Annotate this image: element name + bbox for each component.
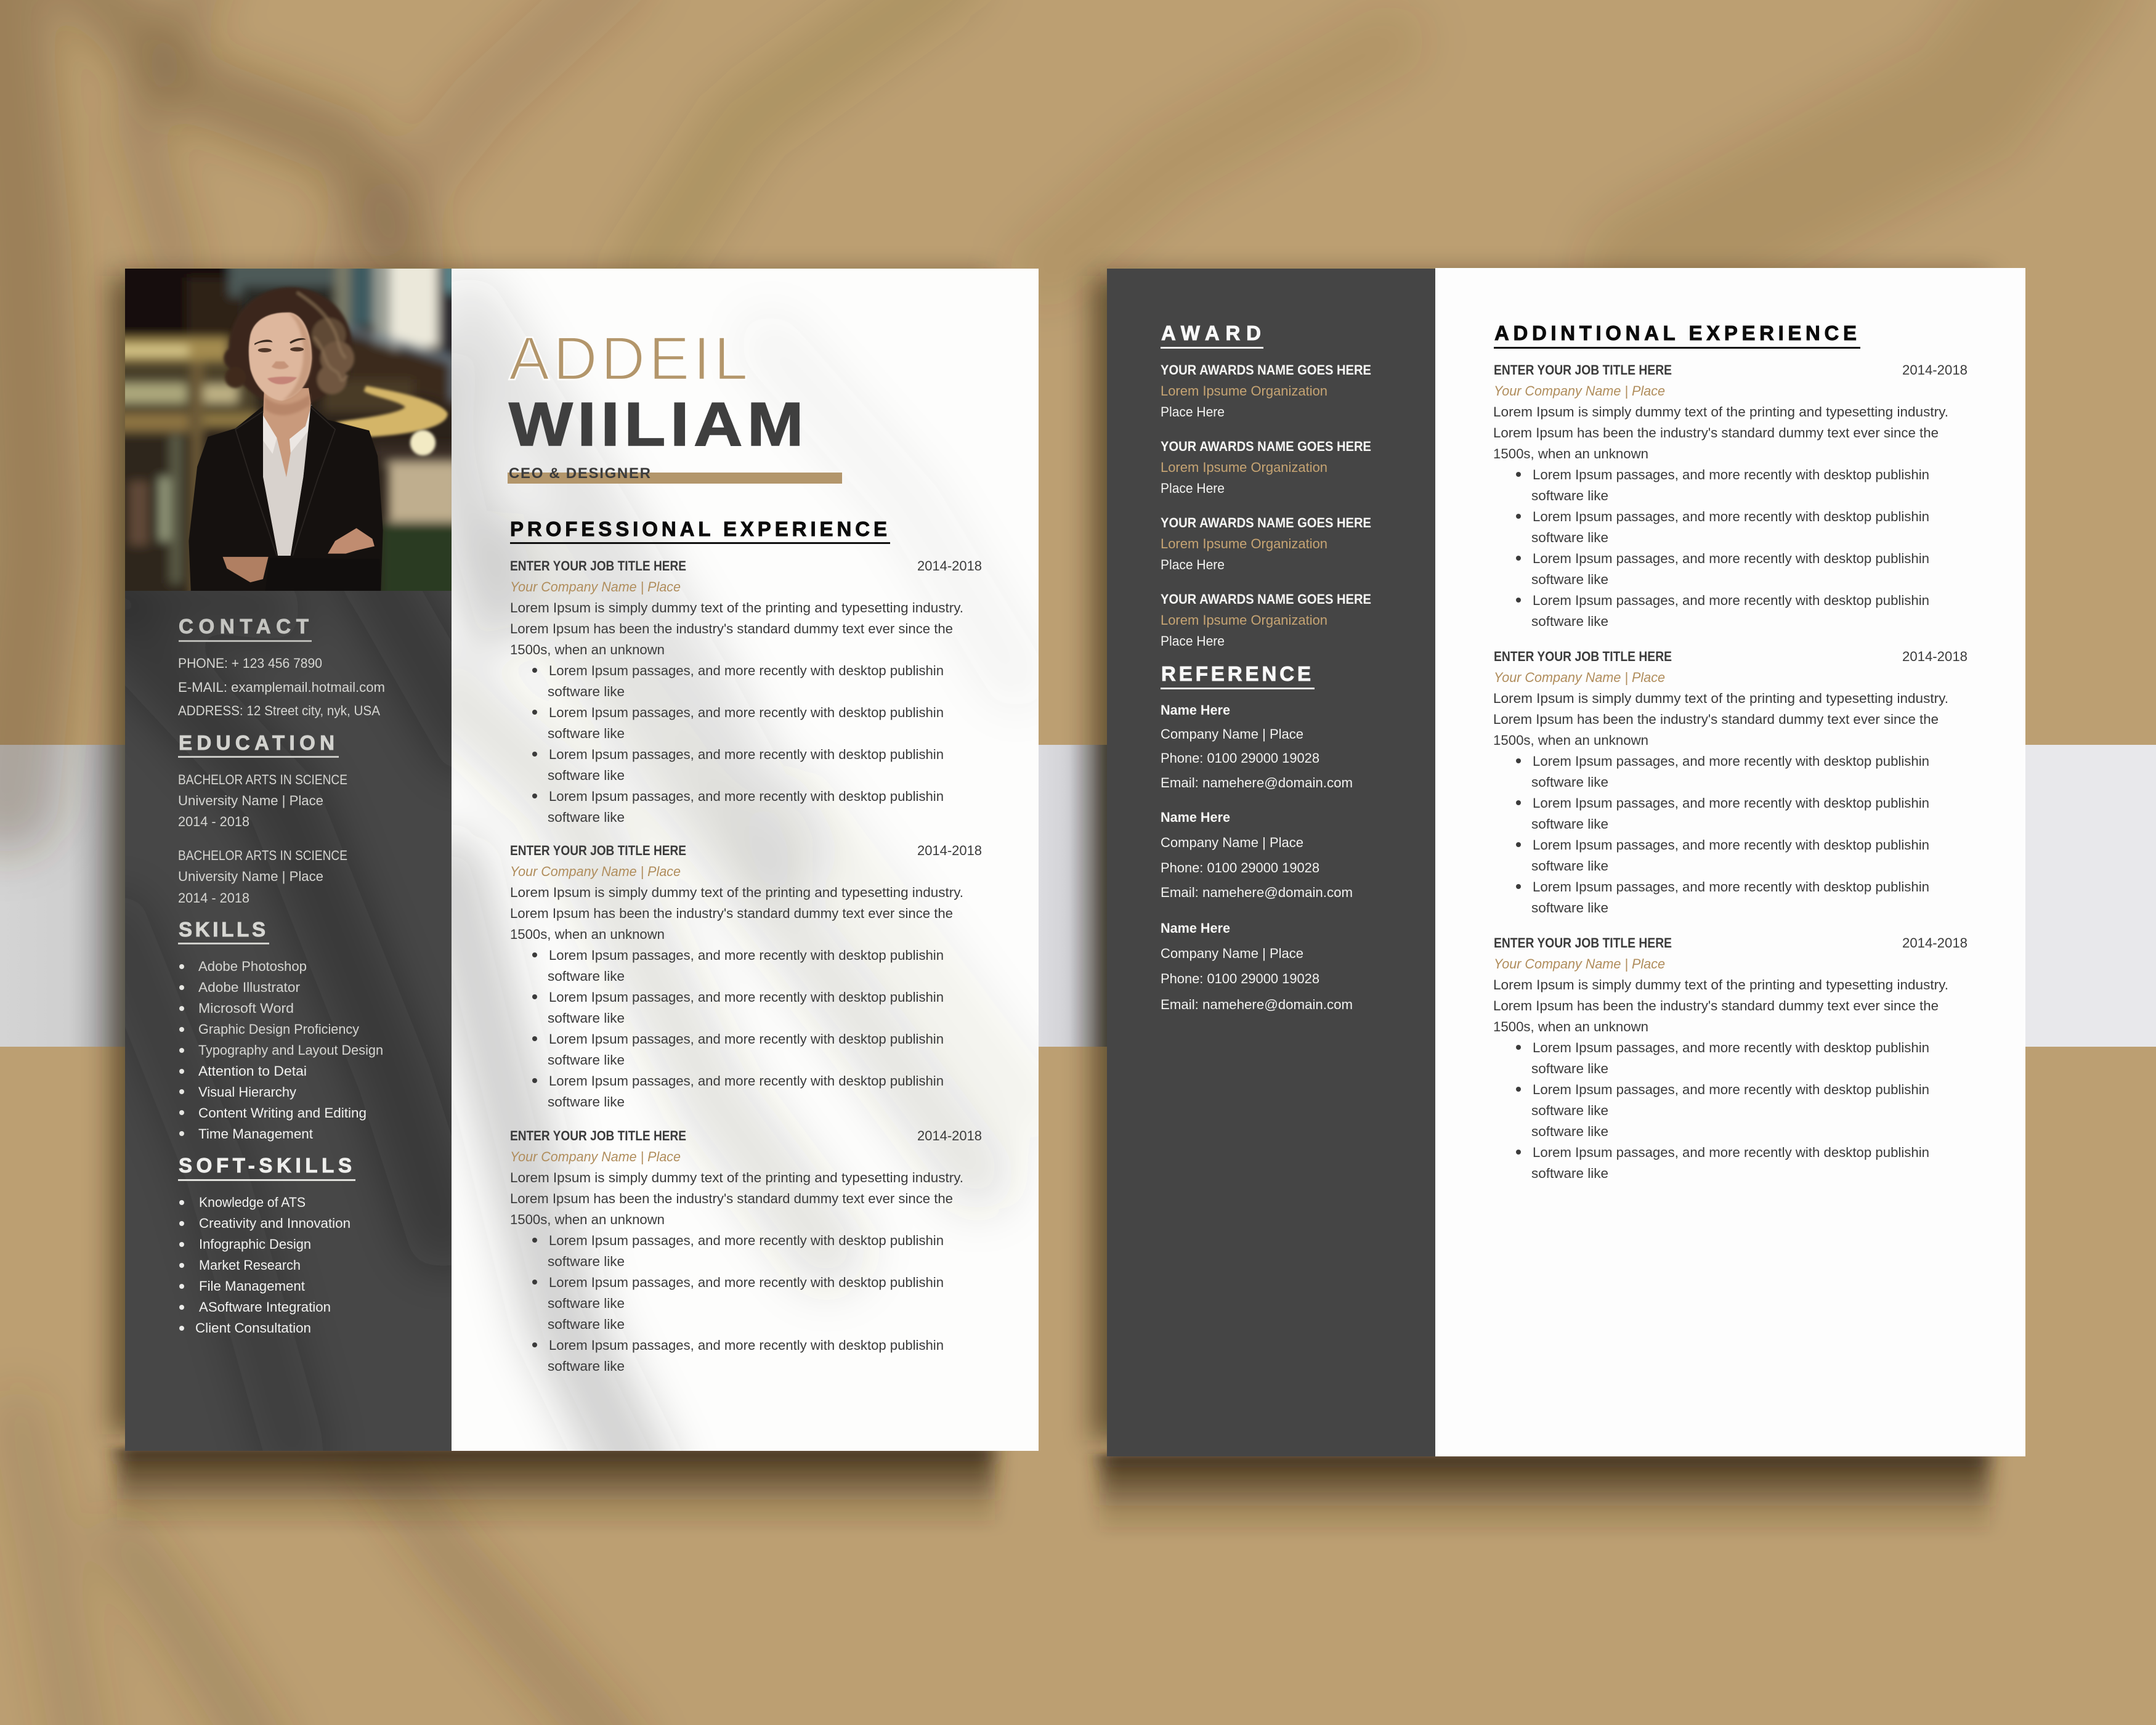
job entry 2: 2014-2018	[1902, 649, 1968, 664]
reference entries: Email: namehere@domain.com	[1161, 997, 1353, 1012]
job entry 2: software like	[1531, 816, 1608, 832]
list: soft skills: File Management	[199, 1278, 305, 1294]
job entry 1: 1500s, when an unknown	[1493, 446, 1648, 461]
list: soft skills: Market Research	[199, 1257, 301, 1273]
job entry 1: software like	[1531, 488, 1608, 503]
job entry 3: Lorem Ipsum passages, and more recently with desktop publishin	[1533, 1040, 1929, 1055]
list: soft skills: Client Consultation	[195, 1320, 311, 1336]
job entry 1	[1493, 362, 1968, 629]
job entry 2: Lorem Ipsum passages, and more recently with desktop publishin	[1533, 837, 1929, 853]
job entry 1: Lorem Ipsum has been the industry's standard dummy text ever since the	[1493, 425, 1939, 440]
award entries: Lorem Ipsume Organization	[1161, 612, 1327, 628]
job entry 3: 2014-2018	[917, 1128, 982, 1143]
job entry 2: 2014-2018	[917, 843, 982, 858]
award entries: YOUR AWARDS NAME GOES HERE	[1161, 515, 1371, 530]
panel: dark sidebar	[1107, 269, 1435, 1456]
shirt	[262, 405, 312, 556]
list: skills: Time Management	[198, 1126, 313, 1142]
job entry 1: Lorem Ipsum passages, and more recently with desktop publishin	[1533, 467, 1929, 482]
text: education entries: 2014 - 2018	[178, 890, 249, 906]
job entry 3: software like	[1531, 1166, 1608, 1181]
heading: contact: CONTACT	[179, 615, 309, 638]
hair	[224, 287, 354, 406]
panel: resume page one	[111, 256, 1039, 1479]
job entry 1: ENTER YOUR JOB TITLE HERE	[510, 558, 686, 574]
panel: dark sidebar	[125, 591, 452, 1451]
job entry 3: software like	[548, 1358, 625, 1374]
job entry 3: Lorem Ipsum is simply dummy text of the printing and typesetting industry.	[510, 1170, 963, 1185]
list: skills: Adobe Photoshop	[198, 959, 307, 974]
heading: education: EDUCATION	[179, 731, 334, 754]
job entry 1: software like	[548, 768, 625, 783]
text: education entries: 2014 - 2018	[178, 814, 249, 829]
job entry 2: software like	[1531, 858, 1608, 874]
list: soft skills: ASoftware Integration	[199, 1299, 331, 1315]
award entries: YOUR AWARDS NAME GOES HERE	[1161, 439, 1371, 454]
job entry 1: software like	[1531, 572, 1608, 587]
job entry 2: Your Company Name | Place	[510, 864, 681, 879]
job entry 2: software like	[548, 1052, 625, 1068]
heading: reference: REFERENCE	[1161, 662, 1311, 685]
reference entries: Phone: 0100 29000 19028	[1161, 750, 1319, 766]
list: soft skills: Knowledge of ATS	[199, 1195, 306, 1210]
job entry 2: Lorem Ipsum passages, and more recently with desktop publishin	[549, 1031, 944, 1047]
job entry 2: software like	[548, 1094, 625, 1110]
list: skills: Typography and Layout Design	[198, 1042, 383, 1058]
reference entries: Company Name | Place	[1161, 835, 1303, 850]
title: last name: WIILIAM	[509, 391, 804, 459]
face	[249, 312, 312, 400]
reference entries: Email: namehere@domain.com	[1161, 775, 1353, 790]
job entry 1: Lorem Ipsum is simply dummy text of the printing and typesetting industry.	[510, 600, 963, 615]
job entry 3: Lorem Ipsum has been the industry's standard dummy text ever since the	[510, 1191, 953, 1206]
award entries: YOUR AWARDS NAME GOES HERE	[1161, 591, 1371, 607]
job entry 3	[510, 1128, 982, 1374]
list: skills	[179, 959, 383, 1142]
job entry 1: 1500s, when an unknown	[510, 642, 665, 657]
job entry 1: 2014-2018	[1902, 362, 1968, 378]
job entry 2: ENTER YOUR JOB TITLE HERE	[1494, 649, 1672, 664]
job entry 2: Lorem Ipsum has been the industry's standard dummy text ever since the	[1493, 712, 1939, 727]
text: education entries: University Name | Place	[178, 793, 323, 808]
award entries: Place Here	[1161, 633, 1225, 649]
job entry 1: Lorem Ipsum passages, and more recently with desktop publishin	[549, 705, 944, 720]
sidebar shadows	[125, 591, 452, 1451]
job entry 2: Lorem Ipsum passages, and more recently with desktop publishin	[1533, 753, 1929, 769]
job entry 2: Lorem Ipsum has been the industry's standard dummy text ever since the	[510, 906, 953, 921]
job entry 1: Your Company Name | Place	[1494, 383, 1665, 399]
photo: portrait of woman in blazer	[125, 269, 452, 591]
text: education entries: University Name | Place	[178, 869, 323, 884]
job entry 2: 1500s, when an unknown	[1493, 733, 1648, 748]
neck	[263, 388, 311, 477]
job entry 2: Lorem Ipsum passages, and more recently with desktop publishin	[1533, 879, 1929, 895]
heading: award: AWARD	[1161, 322, 1261, 344]
job entry 3: Lorem Ipsum passages, and more recently with desktop publishin	[549, 1275, 944, 1290]
job entry 1: software like	[1531, 614, 1608, 629]
job entry 3: ENTER YOUR JOB TITLE HERE	[1494, 935, 1672, 951]
list: skills: Adobe Illustrator	[198, 980, 300, 995]
job entry 2: 1500s, when an unknown	[510, 927, 665, 942]
list: soft skills: Creativity and Innovation	[199, 1216, 351, 1231]
job entry 3: software like	[548, 1296, 625, 1311]
text: education entries: BACHELOR ARTS IN SCIENCE	[178, 772, 347, 787]
job entry 1: Lorem Ipsum passages, and more recently with desktop publishin	[549, 789, 944, 804]
job entry 2: Lorem Ipsum is simply dummy text of the printing and typesetting industry.	[510, 885, 963, 900]
job entry 1: Lorem Ipsum passages, and more recently with desktop publishin	[1533, 593, 1929, 608]
list: soft skills: Infographic Design	[199, 1236, 311, 1252]
list: skills: Visual Hierarchy	[198, 1084, 296, 1100]
job entry 3: Lorem Ipsum passages, and more recently with desktop publishin	[1533, 1145, 1929, 1160]
reference entries: Phone: 0100 29000 19028	[1161, 971, 1319, 986]
job entry 1: software like	[548, 684, 625, 699]
job entry 2: software like	[1531, 774, 1608, 790]
job entry 3: 1500s, when an unknown	[1493, 1019, 1648, 1034]
job entry 2: ENTER YOUR JOB TITLE HERE	[510, 843, 686, 858]
award entries: Lorem Ipsume Organization	[1161, 460, 1327, 475]
job entry 1: 2014-2018	[917, 558, 982, 574]
reference entries: Email: namehere@domain.com	[1161, 885, 1353, 900]
collars	[262, 413, 277, 454]
job entry 1: Lorem Ipsum is simply dummy text of the printing and typesetting industry.	[1493, 404, 1948, 420]
job entry 1	[510, 558, 982, 825]
job entry 3: Your Company Name | Place	[1494, 956, 1665, 972]
job entry 3: Lorem Ipsum passages, and more recently with desktop publishin	[549, 1233, 944, 1248]
text: contact details: E-MAIL: examplemail.hotmail.com	[178, 680, 385, 695]
job entry 2: software like	[1531, 900, 1608, 915]
panel: main white column	[1435, 268, 2025, 1456]
award entries: Place Here	[1161, 557, 1225, 572]
title: first name: ADDEIL	[509, 324, 748, 392]
reference entries: Name Here	[1161, 810, 1230, 825]
job entry 3: Lorem Ipsum passages, and more recently with desktop publishin	[549, 1337, 944, 1353]
panel: resume page two	[1107, 268, 2025, 1456]
background: white horizontal band	[0, 745, 2156, 1047]
text: education entries: BACHELOR ARTS IN SCIENCE	[178, 848, 347, 863]
job entry 1: software like	[548, 810, 625, 825]
job entry 2: Lorem Ipsum passages, and more recently with desktop publishin	[549, 989, 944, 1005]
award entries: Place Here	[1161, 481, 1225, 496]
job entry 1: software like	[548, 726, 625, 741]
heading: soft-skills: SOFT-SKILLS	[179, 1154, 352, 1177]
accent bar	[508, 473, 842, 484]
reference entries: Name Here	[1161, 702, 1230, 718]
job entry 1: Lorem Ipsum passages, and more recently with desktop publishin	[549, 663, 944, 678]
subtitle: CEO & DESIGNER	[509, 465, 650, 482]
job entry 3: software like	[1531, 1124, 1608, 1139]
award entries: YOUR AWARDS NAME GOES HERE	[1161, 362, 1371, 378]
job entry 2	[1493, 649, 1968, 915]
job entry 2: Lorem Ipsum passages, and more recently with desktop publishin	[549, 948, 944, 963]
job entry 3: Your Company Name | Place	[510, 1149, 681, 1164]
job entry 2: Lorem Ipsum passages, and more recently with desktop publishin	[1533, 795, 1929, 811]
job entry 1: ENTER YOUR JOB TITLE HERE	[1494, 362, 1672, 378]
job entry 1: Lorem Ipsum passages, and more recently with desktop publishin	[1533, 509, 1929, 524]
award entries: Place Here	[1161, 404, 1225, 420]
job entry 2: Lorem Ipsum is simply dummy text of the printing and typesetting industry.	[1493, 691, 1948, 706]
heading: additional experience: ADDINTIONAL EXPERIENCE	[1494, 322, 1857, 344]
reference entries: Name Here	[1161, 920, 1230, 936]
award entries: Lorem Ipsume Organization	[1161, 536, 1327, 551]
window shadows across main column	[437, 314, 1035, 1479]
job entry 1: Your Company Name | Place	[510, 579, 681, 595]
job entry 3: software like	[548, 1254, 625, 1269]
heading: skills: SKILLS	[179, 918, 265, 941]
job entry 3: software like	[548, 1317, 625, 1332]
job entry 1: software like	[1531, 530, 1608, 545]
job entry 3: Lorem Ipsum passages, and more recently with desktop publishin	[1533, 1082, 1929, 1097]
job entry 3: 1500s, when an unknown	[510, 1212, 665, 1227]
job entry 2: Your Company Name | Place	[1494, 670, 1665, 685]
award entries	[1161, 362, 1371, 649]
job entry 1: Lorem Ipsum passages, and more recently with desktop publishin	[1533, 551, 1929, 566]
job entry 2: software like	[548, 1010, 625, 1026]
jacket	[188, 405, 383, 592]
list: skills: Content Writing and Editing	[198, 1105, 367, 1121]
job entry 3: Lorem Ipsum is simply dummy text of the printing and typesetting industry.	[1493, 977, 1948, 992]
job entry 3: Lorem Ipsum has been the industry's standard dummy text ever since the	[1493, 998, 1939, 1013]
page shadows	[111, 276, 1990, 1540]
award entries: Lorem Ipsume Organization	[1161, 383, 1327, 399]
job entry 3: software like	[1531, 1103, 1608, 1118]
text: education entries	[178, 772, 347, 906]
job entry 3: ENTER YOUR JOB TITLE HERE	[510, 1128, 686, 1143]
job entry 3: software like	[1531, 1061, 1608, 1076]
list: skills: Attention to Detai	[198, 1063, 307, 1079]
reference entries	[1161, 702, 1353, 1012]
hands	[223, 557, 269, 582]
job entry 3: 2014-2018	[1902, 935, 1968, 951]
job entry 1: Lorem Ipsum has been the industry's standard dummy text ever since the	[510, 621, 953, 636]
job entry 2: software like	[548, 968, 625, 984]
heading: professional experience: PROFESSIONAL EXPERIENCE	[510, 518, 887, 540]
list: soft skills	[179, 1195, 351, 1336]
list: skills: Microsoft Word	[198, 1000, 294, 1016]
reference entries: Phone: 0100 29000 19028	[1161, 860, 1319, 875]
job entry 2	[510, 843, 982, 1110]
text: contact details: ADDRESS: 12 Street city, nyk, USA	[178, 703, 380, 718]
list: skills: Graphic Design Proficiency	[198, 1021, 359, 1037]
reference entries: Company Name | Place	[1161, 726, 1303, 742]
text: contact details	[178, 656, 385, 718]
job entry 1: Lorem Ipsum passages, and more recently with desktop publishin	[549, 747, 944, 762]
reference entries: Company Name | Place	[1161, 946, 1303, 961]
panel: main white column	[452, 269, 1039, 1451]
text: contact details: PHONE: + 123 456 7890	[178, 656, 322, 671]
job entry 2: Lorem Ipsum passages, and more recently with desktop publishin	[549, 1073, 944, 1089]
job entry 3	[1493, 935, 1968, 1181]
